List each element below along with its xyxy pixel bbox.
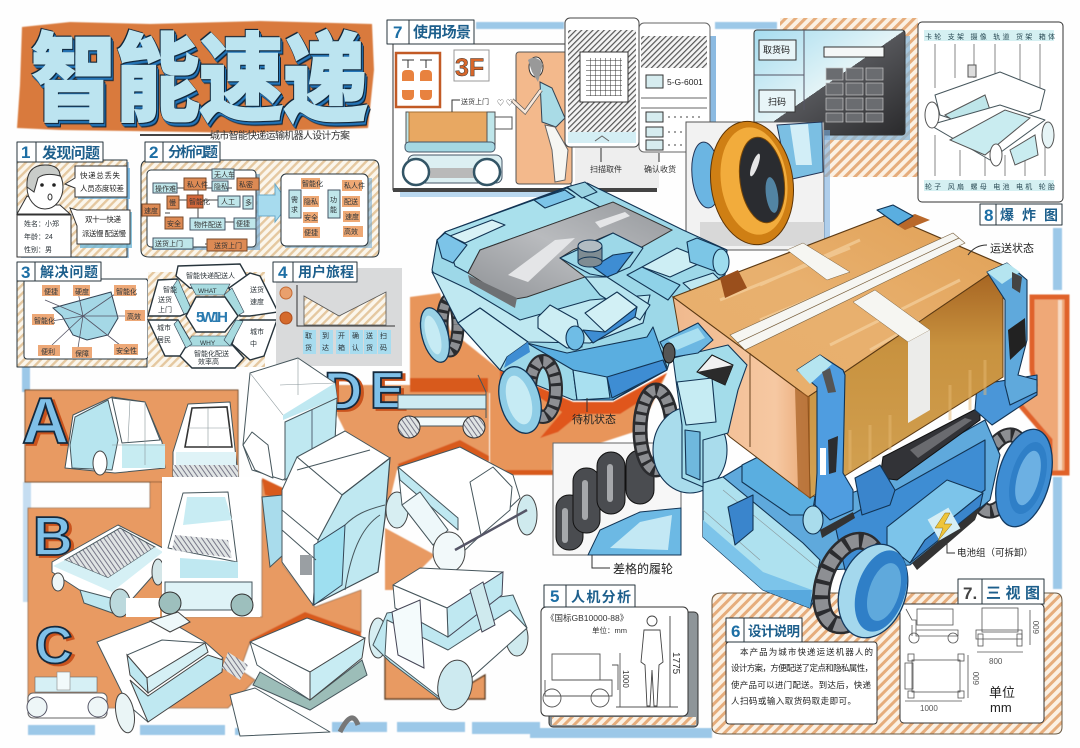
pickup code button: 取货码	[763, 44, 790, 55]
bottom wheel	[492, 361, 556, 438]
side view drawing	[906, 609, 958, 643]
dimension 1775: 1775	[670, 652, 681, 675]
journey steps: 送	[366, 331, 373, 340]
result box: 隐私	[304, 197, 318, 206]
header 6: 6	[731, 622, 740, 641]
panel: 5W1H hexagons: 上门	[158, 305, 172, 314]
camera lens detail	[686, 116, 830, 250]
main robot (delivery state)	[640, 205, 1062, 647]
description text box: 设计方案，方便配送了定点和隐私属性，	[731, 663, 873, 673]
right-hand orange frame behind main robot	[1020, 297, 1067, 473]
header 4: 4	[278, 263, 288, 282]
exploded part labels	[924, 30, 1055, 191]
speech bubble 2: 双十一快递	[85, 214, 122, 224]
journey steps: 箱	[338, 343, 345, 352]
phone 1: QR scan screen	[565, 18, 639, 147]
panel: 5W1H hexagons: 智能	[163, 285, 177, 294]
result box: 需	[291, 196, 298, 204]
unit mark: mm	[990, 700, 1012, 715]
header 7 usage	[387, 20, 474, 44]
persona info: 姓名：小郑	[24, 219, 59, 228]
mind map nodes: 安全	[167, 219, 181, 228]
speech bubble 1: 快递总丢失	[80, 170, 120, 180]
result box: 速度	[345, 212, 359, 221]
human figure	[641, 616, 670, 707]
control channel	[560, 233, 643, 277]
persona info	[17, 215, 71, 257]
delivery robot in scene	[403, 97, 512, 185]
header 7 usage: 使用场景	[413, 23, 471, 41]
panel: 5W1H hexagons: 中	[250, 339, 257, 348]
phone labels: 扫描取件	[590, 164, 622, 174]
roller front	[538, 305, 584, 350]
mind map nodes: 人工	[221, 198, 235, 206]
mind map nodes: 无人车	[214, 170, 235, 179]
header 5: 人机分析	[571, 589, 631, 605]
black battery cylinder	[880, 407, 980, 480]
header 7 three views	[958, 579, 1044, 604]
dimension 600 side: 600	[972, 671, 981, 685]
top view drawing	[905, 654, 968, 701]
header 3: 解决问题	[40, 264, 98, 280]
dimension 1000 top: 1000	[920, 704, 938, 713]
persona info: 年龄：24	[24, 232, 53, 241]
letter C: C	[35, 617, 73, 675]
folded robot (standby state)	[415, 182, 729, 438]
panel: 5W1H hexagons: 城市	[157, 323, 171, 332]
long strip	[742, 455, 815, 515]
radar labels: 智能化	[34, 316, 55, 325]
front wheel	[811, 533, 919, 647]
mind map nodes: 隐私	[214, 182, 228, 191]
input field	[824, 47, 884, 57]
radar labels: 硬度	[75, 287, 89, 296]
mind map nodes: 速度	[144, 206, 158, 215]
cart side elevation	[543, 653, 678, 707]
subtitle: 城市智能快递运输机器人设计方案	[210, 129, 350, 142]
radar labels: 安全性	[116, 346, 137, 355]
panel: 5W1H hexagons: WHY	[200, 340, 216, 347]
journey steps: 码	[380, 344, 387, 352]
base	[703, 420, 1000, 608]
dimension 600: 600	[1032, 620, 1041, 634]
header 8: 爆炸图	[1000, 207, 1058, 223]
persona info: 性别：男	[24, 245, 52, 254]
front plate	[703, 477, 820, 608]
panel: 5W1H hexagons	[148, 264, 278, 368]
exploded robot drawing	[925, 65, 1054, 166]
result box: 便捷	[304, 228, 318, 237]
header 8: 8	[984, 206, 993, 225]
result box: 智能化	[302, 179, 323, 188]
three views box	[900, 604, 1044, 723]
header 8	[980, 204, 1062, 225]
label: tire: 差格的履轮	[613, 561, 673, 576]
header 2: 分析问题	[168, 144, 218, 160]
radar labels: 高效	[127, 312, 141, 321]
battery module	[887, 480, 983, 570]
title banner	[17, 21, 374, 142]
scan button: 扫码	[768, 96, 786, 107]
tape strips	[730, 233, 965, 350]
grey top plate	[468, 202, 672, 300]
panel 5: ergonomics	[530, 607, 712, 738]
result box: 高效	[344, 227, 358, 236]
arrow	[258, 184, 289, 222]
label: standby state: 待机状态	[572, 412, 616, 426]
result box: 功	[330, 195, 337, 204]
delivery robot in scene: 送货上门	[461, 97, 489, 106]
panel 4: user journey	[276, 268, 402, 366]
sketch C main: three-quarter robot	[97, 612, 248, 734]
exploded view panel	[918, 22, 1063, 202]
speech bubble 2: 派送慢 配送慢	[82, 228, 126, 238]
header 2	[145, 142, 220, 162]
letter D: D	[324, 362, 362, 421]
cardboard box	[673, 215, 1003, 498]
label: battery pack	[947, 540, 1033, 559]
mind map nodes: 多	[245, 198, 252, 207]
label: standby state	[572, 398, 616, 426]
tower mast	[660, 323, 747, 487]
result box: 安全	[304, 213, 318, 222]
person: ♡ ♡	[497, 99, 513, 107]
panel 1: problem discovery	[17, 160, 132, 258]
left pod	[458, 308, 528, 370]
mid clip shadow	[720, 270, 747, 298]
journey steps: 到	[322, 332, 329, 340]
tire detail inset	[553, 443, 681, 555]
journey steps	[303, 330, 391, 354]
mind map nodes: 便捷	[236, 219, 250, 228]
center hexagon	[186, 297, 238, 332]
header 3	[17, 262, 101, 282]
fire extinguisher cabinet	[396, 53, 440, 107]
header 4: 用户旅程	[298, 264, 354, 280]
result box	[281, 174, 372, 248]
header 6	[726, 618, 802, 642]
speech bubble 1: 人员态度较差	[80, 183, 124, 193]
journey steps: 认	[352, 343, 359, 352]
result box: 配送	[344, 197, 358, 206]
mind map nodes: 私人件	[187, 180, 208, 189]
panel: 5W1H hexagons: 5W1H	[196, 309, 228, 326]
left wheel	[415, 299, 458, 365]
header 1: 1	[21, 143, 30, 162]
label: tire	[592, 555, 673, 576]
sketch B right: front view with panel	[126, 477, 260, 617]
sketch: central tall robot	[262, 431, 390, 605]
radar labels: 保障	[75, 349, 89, 358]
unit note: 单位：mm	[592, 625, 627, 635]
front module block	[583, 292, 637, 343]
letter E: E	[370, 362, 405, 420]
top clip	[877, 205, 930, 230]
left tread	[640, 390, 672, 470]
radar labels: 便利	[41, 347, 55, 356]
unit mark	[989, 685, 1015, 715]
mind map nodes: 送货上门	[214, 241, 242, 250]
title text: 智能速递	[31, 27, 368, 134]
sketch: cart by D E	[398, 375, 486, 438]
speech bubble 2	[70, 208, 132, 248]
speech bubble 1	[65, 166, 130, 199]
mind map nodes: 物件配送	[194, 220, 222, 229]
key buttons	[826, 68, 883, 122]
journey steps: 货	[305, 343, 312, 352]
phone labels: 确认收货	[644, 164, 676, 174]
panel 3: solving the problem	[17, 279, 148, 367]
journey steps: 取	[305, 332, 312, 340]
mind map nodes: 私密	[239, 180, 253, 189]
header 5: 5	[550, 587, 559, 606]
radar labels: 智能化	[116, 287, 137, 296]
phone 2: confirmation screen	[639, 23, 716, 154]
exploded part labels: 卡轮 支架 摄像 轨道 货架 箱体	[925, 32, 1055, 41]
exploded part labels: 轮子 风扇 螺母 电池 电机 轮胎	[925, 182, 1055, 191]
pickup code button	[759, 40, 796, 60]
sketch: right vehicle	[386, 447, 537, 572]
panel: 5W1H hexagons: 居民	[157, 336, 171, 344]
panel: 5W1H hexagons: WHAT	[198, 288, 217, 295]
wheel arch	[653, 407, 727, 493]
panel: 5W1H hexagons: 智能化配送	[194, 349, 229, 358]
result box: 私人件	[344, 181, 365, 190]
keypad interface	[754, 18, 918, 177]
description text box: 本产品为城市快递运送机器人的	[740, 647, 873, 657]
sketch C side view	[27, 672, 108, 718]
mind map nodes: 智能化	[189, 197, 210, 206]
dimension 800: 800	[989, 657, 1003, 666]
emotion icons	[280, 287, 292, 324]
header 7 three views: 三视图	[986, 585, 1040, 602]
roller right	[687, 238, 729, 275]
mind map nodes: 慢	[169, 198, 176, 207]
mind map nodes	[142, 169, 259, 251]
sketch A left: van	[65, 397, 165, 475]
radar labels	[32, 285, 145, 358]
small block	[728, 495, 753, 545]
description text box: 使产品可以进门配送。到达后，快递	[731, 680, 871, 690]
result box: 求	[291, 205, 298, 214]
cylinder port	[578, 240, 602, 267]
header 6: 设计说明	[748, 624, 800, 639]
clip	[683, 273, 728, 303]
front left clamp	[797, 355, 853, 520]
description text box	[726, 642, 877, 724]
sketch: tall robot	[243, 358, 337, 480]
sketch B left: top-down flat view	[52, 525, 165, 617]
label: delivery state: 运送状态	[990, 241, 1034, 255]
right clamp	[987, 263, 1037, 405]
radar labels: 便捷	[44, 287, 58, 296]
journey steps: 货	[366, 343, 373, 352]
journey steps: 确	[352, 331, 359, 340]
standard note: 《国标GB10000-88》	[546, 613, 628, 623]
letter B: B	[33, 505, 73, 567]
sketch: lower centre vehicle	[230, 618, 367, 736]
body	[432, 183, 727, 400]
door	[516, 52, 572, 184]
journey steps: 扫	[380, 331, 387, 340]
unit mark: 单位	[989, 685, 1015, 700]
panel 6: design description and views	[712, 593, 1062, 734]
panel 7: usage scenario	[393, 44, 676, 197]
radar web chart	[45, 292, 130, 348]
mind map nodes: 操作难	[155, 184, 176, 193]
journey steps: 开	[338, 332, 345, 340]
mind map nodes: 送货上门	[155, 239, 183, 248]
title orange marker blob	[17, 21, 374, 133]
scan button	[759, 90, 795, 112]
header 2: 2	[149, 143, 158, 162]
floor sign: 3F	[455, 54, 484, 82]
panel: 5W1H hexagons: 城市	[250, 327, 264, 336]
header 1	[17, 142, 103, 162]
panel: 5W1H hexagons: 效率高	[198, 357, 219, 366]
label: delivery state	[968, 241, 1034, 255]
header 7 usage: 7	[393, 23, 402, 42]
journey steps: 达	[322, 343, 329, 352]
dimension 1000: 1000	[621, 670, 630, 688]
result box: 能	[330, 205, 337, 214]
orange backdrop: concept sketches	[25, 293, 1067, 708]
panel 2: problem analysis	[141, 160, 379, 257]
panel: 5W1H hexagons: 智能快递配送人	[186, 271, 235, 280]
header 4	[273, 262, 357, 282]
front view drawing	[976, 608, 1030, 652]
journey chart	[297, 285, 395, 326]
sketch A right: front view	[173, 402, 238, 477]
header 5	[544, 585, 635, 607]
persona face	[17, 165, 70, 214]
letter A: A	[22, 384, 69, 457]
header 7 three views: 7.	[963, 584, 977, 603]
panel: 5W1H hexagons: 送货	[250, 285, 264, 294]
panel: 5W1H hexagons: 送货	[158, 295, 172, 304]
phone 2: confirmation screen: 5-G-6001	[667, 77, 703, 87]
label: battery pack: 电池组（可拆卸）	[957, 547, 1033, 559]
side connectors	[855, 465, 895, 515]
right module	[642, 248, 707, 277]
rail	[835, 440, 985, 570]
phone labels	[590, 148, 676, 174]
header 3: 3	[21, 263, 30, 282]
top rim	[445, 188, 600, 273]
sketch: lower right vehicle	[369, 568, 528, 713]
person	[497, 57, 568, 182]
header 1: 发现问题	[42, 144, 100, 162]
front roller	[803, 506, 855, 538]
description text box: 人扫码或输入取货码取走即可。	[731, 696, 856, 706]
rear right wheel	[968, 423, 1062, 533]
lower blue band	[527, 327, 667, 400]
panel: 5W1H hexagons: 速度	[250, 297, 264, 306]
